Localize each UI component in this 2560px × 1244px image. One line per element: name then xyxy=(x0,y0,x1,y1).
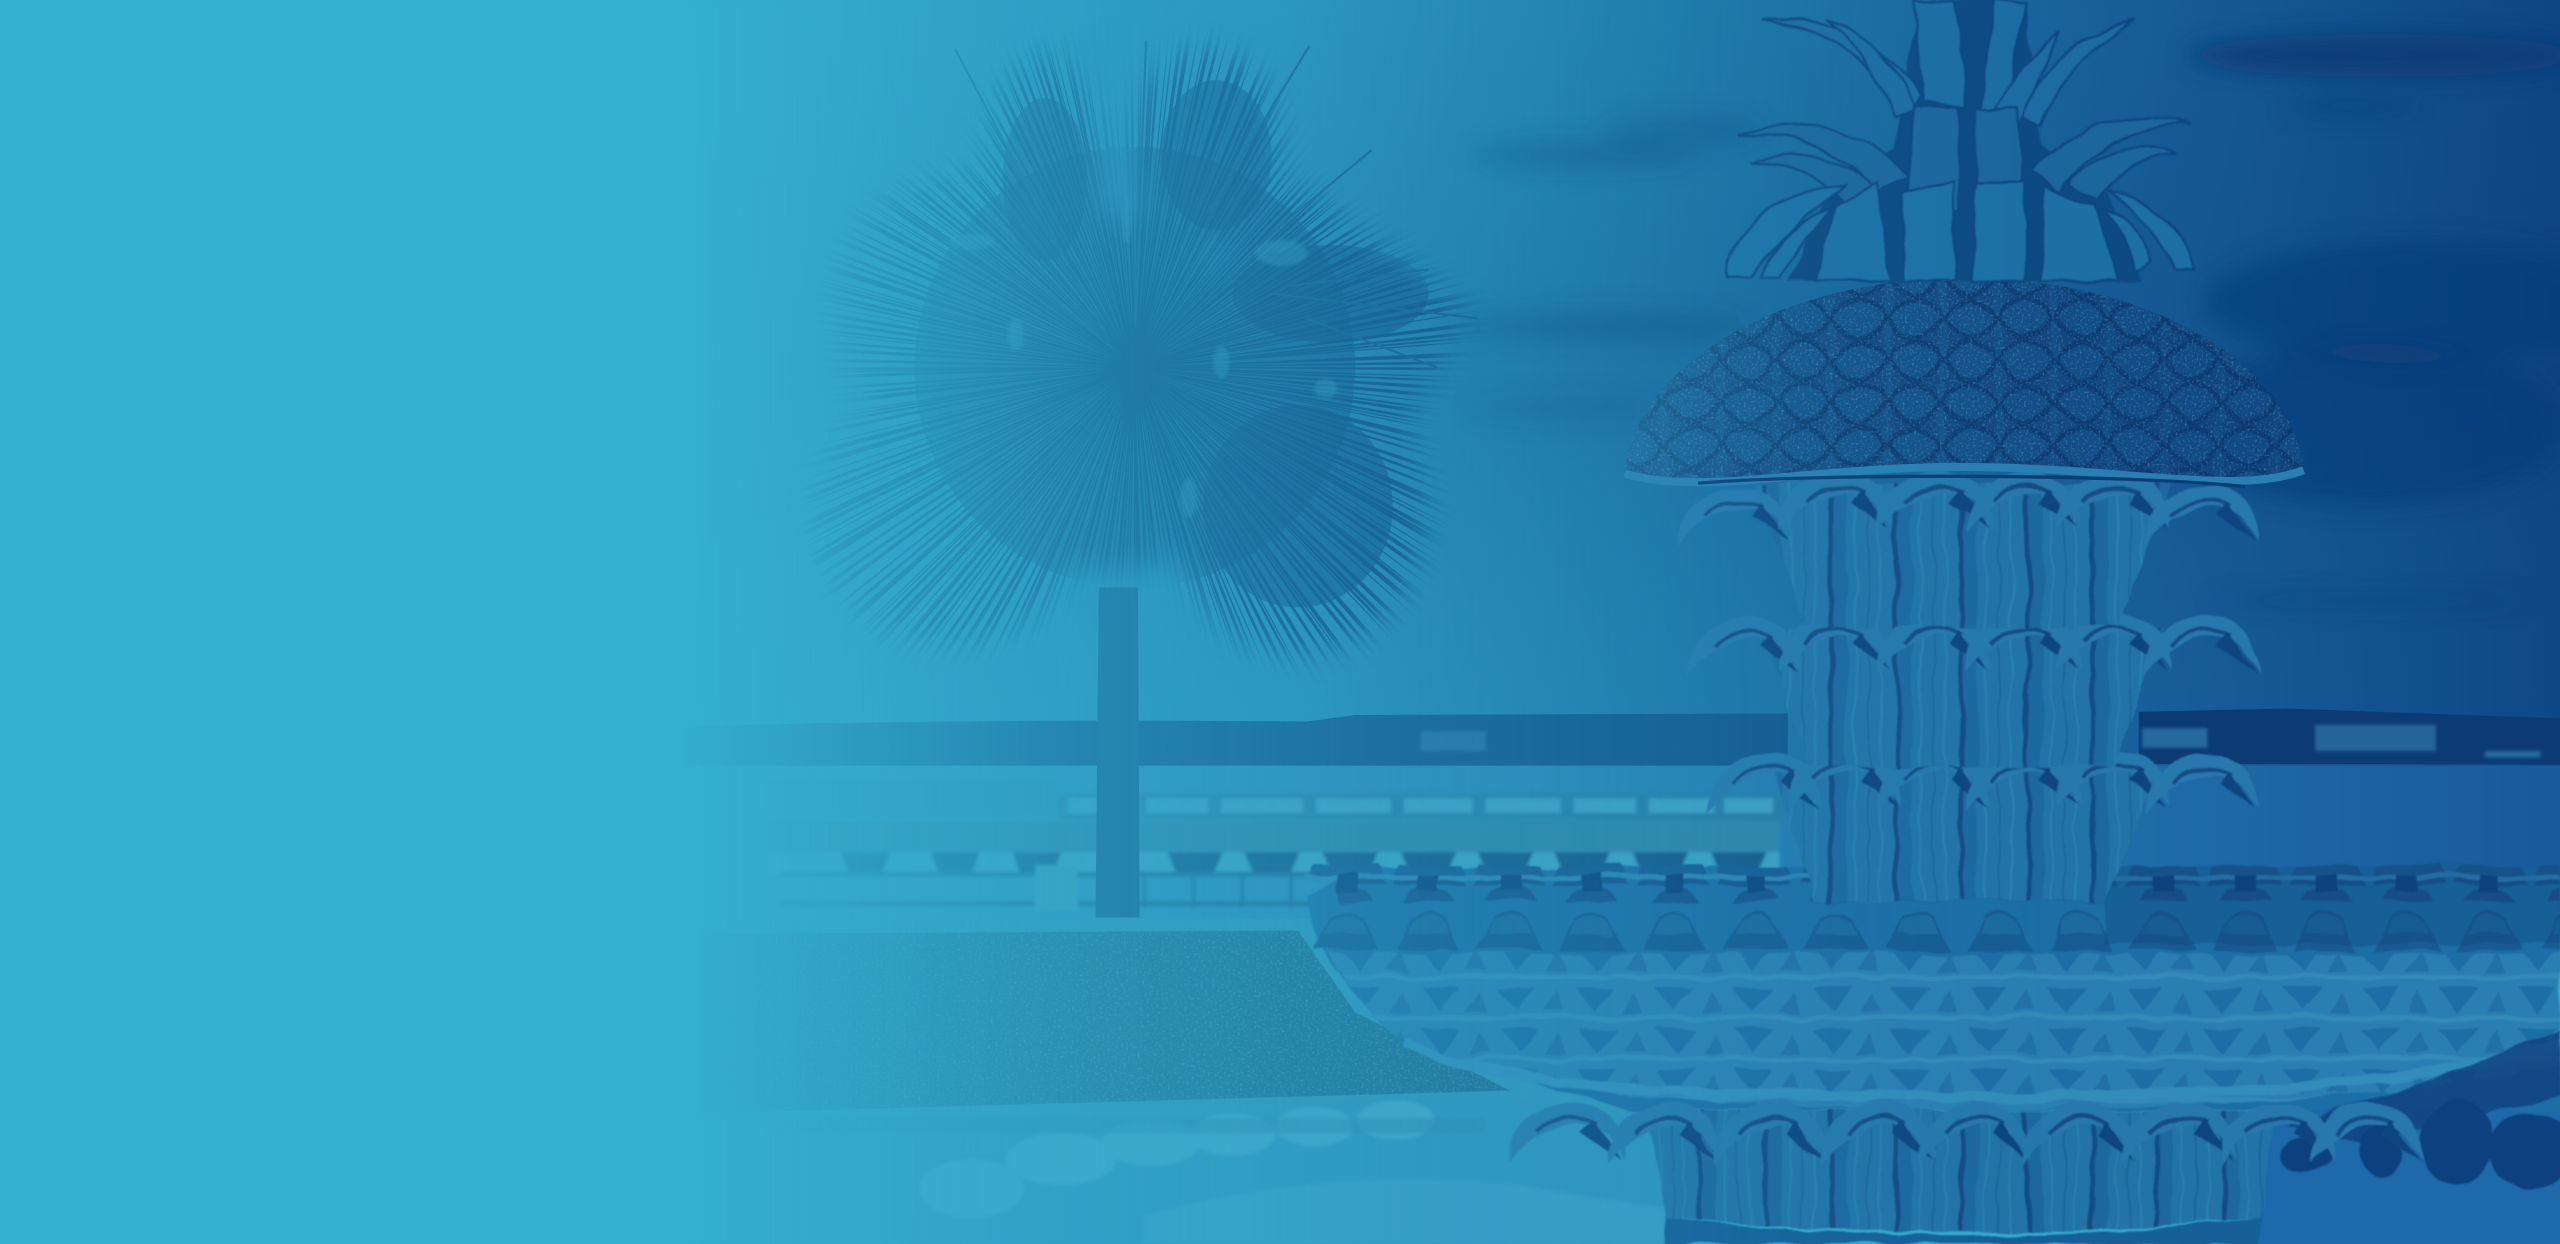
lower water right xyxy=(2253,1061,2560,1244)
pineapple crown xyxy=(1727,0,2194,281)
pineapple dome xyxy=(1624,280,2305,488)
palm fronds xyxy=(914,80,1429,607)
lattice rows xyxy=(1331,953,2560,1110)
dark clouds xyxy=(1453,34,2560,606)
pineapple third tier xyxy=(1708,751,2261,901)
bump row xyxy=(1306,865,2560,950)
palm trunk xyxy=(1096,588,1140,917)
palm highlights xyxy=(949,198,1337,518)
pineapple tiers xyxy=(1678,473,2261,901)
ground xyxy=(0,919,1682,1244)
fountain tiered base xyxy=(1306,865,2560,1110)
middle leaves xyxy=(1737,108,2191,212)
dark right bumps xyxy=(2279,1032,2560,1190)
background scene illustration xyxy=(755,0,2560,1244)
crown silhouette xyxy=(1788,0,2142,281)
far shoreline xyxy=(686,709,2560,767)
scalloped basin xyxy=(1306,865,2560,1110)
lawn hedge xyxy=(702,931,1510,1113)
water xyxy=(0,766,2560,929)
bottom fountain tier xyxy=(1510,1103,2424,1244)
lower basin rim xyxy=(767,1097,1665,1244)
drooping crown curls xyxy=(1727,180,2194,281)
tall top leaves xyxy=(1763,0,2132,127)
pier railing xyxy=(767,780,1784,911)
palm tree xyxy=(914,41,1478,917)
pineapple first tier xyxy=(1678,473,2260,627)
sky xyxy=(0,0,2560,767)
pineapple second tier xyxy=(1688,614,2260,767)
back bump row xyxy=(1339,869,2560,901)
long frond tips xyxy=(955,41,1478,367)
